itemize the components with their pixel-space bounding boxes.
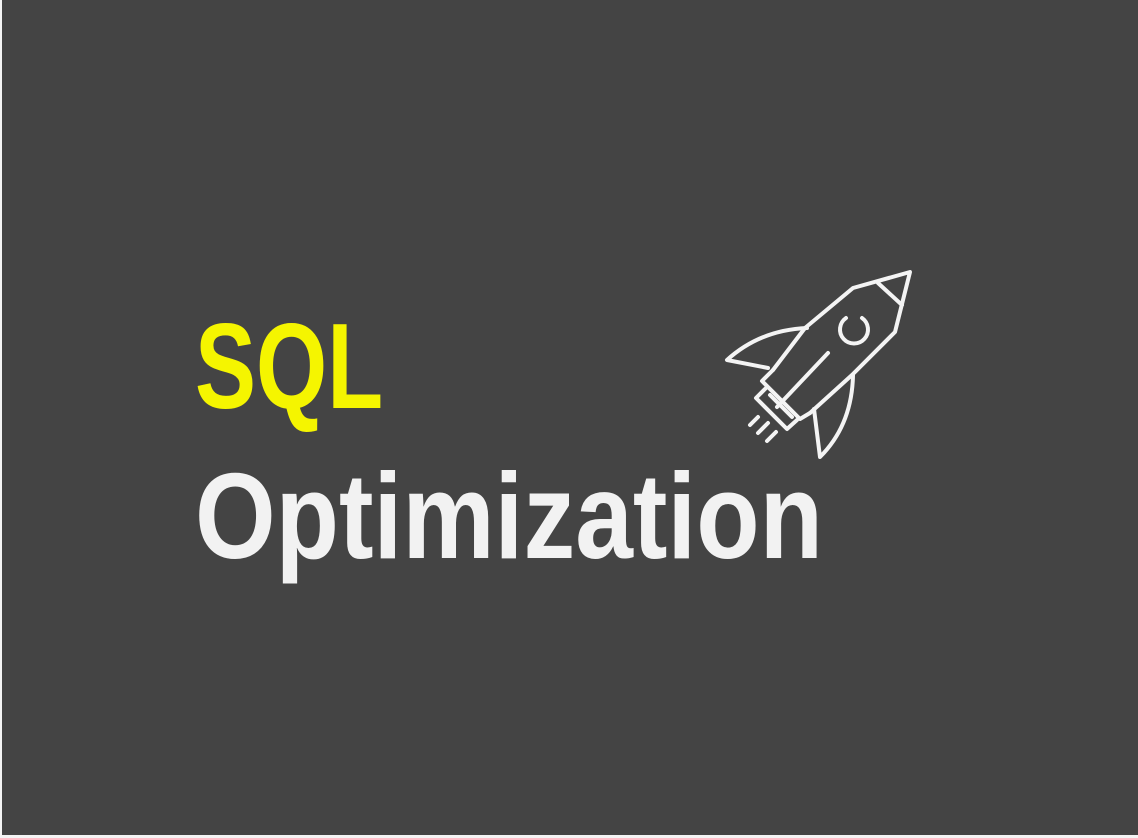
title: Optimization: Optimization — [195, 448, 823, 584]
body — [773, 272, 910, 413]
left edge strip — [0, 0, 2, 838]
window — [840, 318, 868, 343]
right fin — [814, 375, 853, 457]
title: SQL: SQL — [195, 298, 383, 434]
left fin — [727, 328, 807, 368]
slot — [777, 353, 828, 407]
nozzle — [756, 370, 810, 429]
bottom edge strip — [0, 835, 1138, 838]
exhaust lines — [750, 417, 776, 441]
